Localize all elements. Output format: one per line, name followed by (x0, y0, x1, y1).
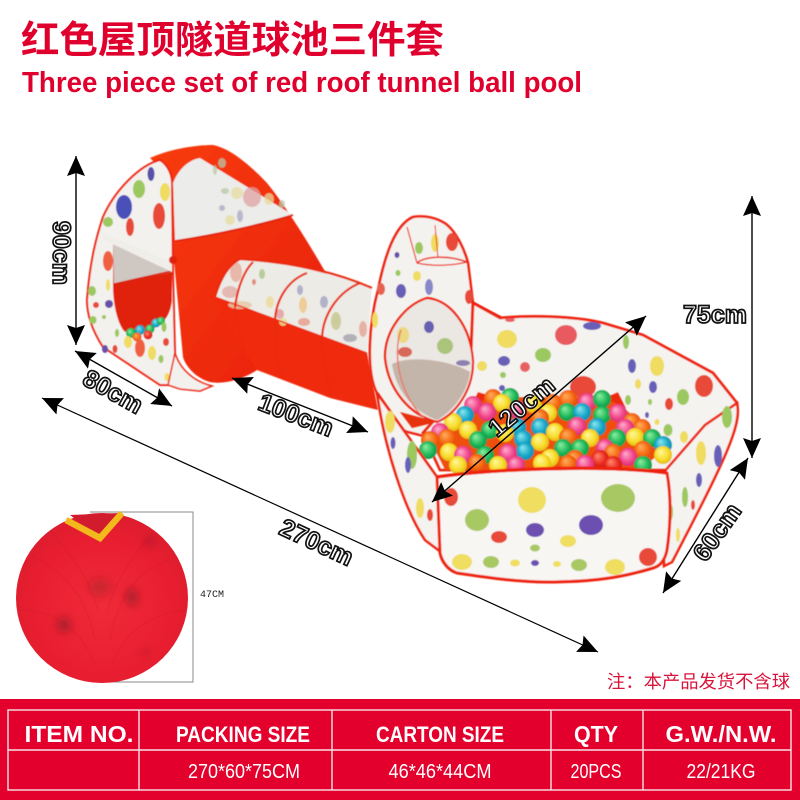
table header row: G.W./N.W. (666, 721, 776, 747)
balls bed (430, 397, 670, 470)
bag size label: 47CM (200, 590, 224, 601)
illustration: tunnel (215, 259, 378, 410)
bag yellow trim (66, 513, 122, 538)
front window faded dots (213, 158, 285, 225)
side panel dots (88, 167, 170, 381)
arrow: 120cm pool diagonal: 120cm (483, 371, 561, 443)
icon: folded storage bag (16, 512, 224, 683)
side door opening (113, 243, 172, 334)
table values row: 20PCS (570, 761, 622, 783)
front pool panel (437, 468, 670, 582)
note: balls not included: 注：本产品发货不含球 (607, 672, 790, 692)
illustration: ball pool (377, 298, 738, 582)
tent side white panel (87, 160, 175, 385)
right pool panel (664, 403, 738, 566)
tent foot (168, 353, 212, 391)
tunnel rings (215, 259, 372, 396)
table values row (188, 761, 756, 783)
back panel dots (477, 318, 713, 443)
arrow: 90cm height: 90cm (47, 221, 75, 285)
table background (0, 699, 800, 800)
title: English heading: Three piece set of red roof tunnel ball pool (22, 67, 582, 99)
table header row: QTY (574, 721, 618, 747)
illustration: right tent (370, 216, 500, 440)
bag body (16, 513, 188, 683)
arrow: 60cm pool width (663, 458, 748, 593)
left pool panel (377, 393, 441, 552)
table: product specification (0, 699, 800, 800)
right tent dots (372, 233, 473, 328)
arrow: 80cm depth (75, 351, 172, 420)
tent door on pool (385, 298, 473, 422)
table values row: 270*60*75CM (188, 761, 300, 783)
right tent body (370, 216, 500, 440)
title: Chinese heading: 红色屋顶隧道球池三件套 (21, 20, 444, 62)
table header row (24, 721, 776, 747)
tunnel faded dots (222, 262, 367, 342)
tent body red (150, 145, 330, 383)
tunnel mesh upper (215, 259, 372, 353)
bag blotches (57, 536, 157, 656)
arrow: 270cm total length (42, 398, 598, 652)
bag opening (70, 513, 120, 538)
side door balls (126, 317, 165, 342)
coloured balls (419, 388, 672, 474)
arrow: 80cm depth: 80cm (78, 364, 148, 420)
arrow: 60cm pool width: 60cm (688, 498, 747, 567)
arrow: 75cm height: 75cm (683, 301, 747, 329)
table grid (8, 710, 791, 790)
bag creases (20, 530, 185, 665)
table values row: 22/21KG (686, 761, 756, 783)
top window frame (407, 227, 467, 265)
arrow: 120cm pool diagonal (432, 316, 646, 502)
arrow: 100cm tunnel (232, 378, 368, 443)
illustration: left tent (87, 145, 330, 391)
bag dimension bracket (90, 512, 193, 682)
table header row: PACKING SIZE (176, 722, 310, 747)
table header row: ITEM NO. (24, 721, 134, 747)
table header row: CARTON SIZE (376, 722, 504, 747)
tent front window (173, 158, 293, 241)
table values row: 46*46*44CM (388, 761, 492, 783)
tunnel red lower (215, 297, 378, 410)
arrow: 100cm tunnel: 100cm (255, 389, 337, 443)
pool back panels (423, 303, 737, 470)
arrow: 270cm total length: 270cm (275, 514, 358, 572)
